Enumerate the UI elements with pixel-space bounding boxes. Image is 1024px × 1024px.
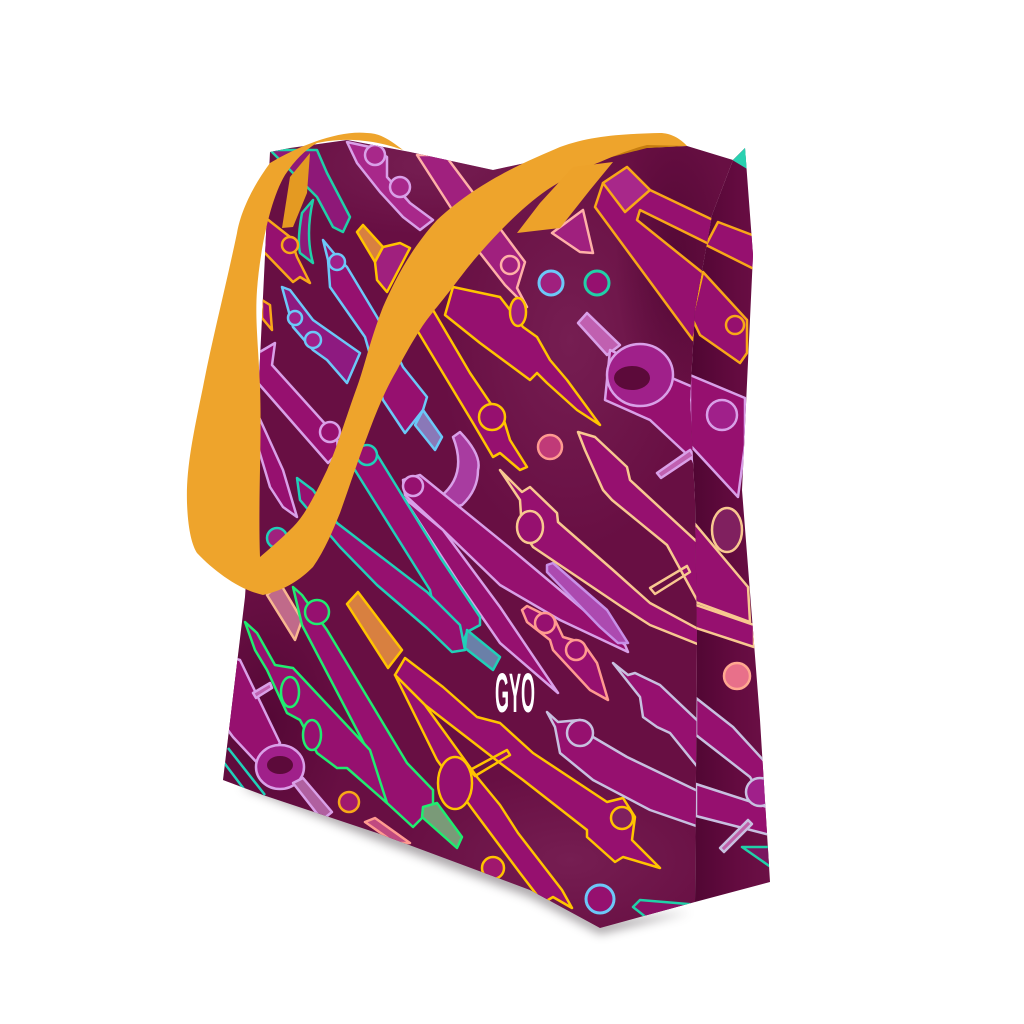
knobs upper: [538, 271, 609, 459]
compass: lilac with arc: [403, 432, 628, 693]
compass: orange left small: [262, 215, 310, 330]
compass: orange top right: [594, 166, 712, 342]
compass: green: [245, 587, 462, 848]
compass: peach long: [498, 430, 697, 646]
compass: lilac pencil: [547, 563, 628, 643]
compass: salmon top: [417, 155, 593, 307]
illustration: tote bag with compass pattern: [186, 132, 770, 939]
compass: salmon small: [522, 606, 608, 700]
strap: [187, 133, 687, 595]
bag front panel: [223, 140, 733, 928]
strap rear fold: [600, 138, 687, 160]
compass: gold large: [347, 592, 660, 908]
compass: lilac left long: [258, 343, 340, 517]
ground shadow: [240, 785, 690, 934]
bag side gusset: [690, 148, 775, 902]
knobs lower: [339, 792, 700, 918]
compass: blue lower: [282, 287, 360, 383]
compass: lilac top: [347, 142, 433, 230]
compass: gold handle and arms: [357, 225, 600, 470]
compass: lilac ring: [578, 313, 700, 478]
compass: teal large: [267, 445, 500, 670]
tube: peach handle: [267, 583, 302, 640]
strap left tab: [282, 153, 310, 228]
illustration: tote bag with compass pattern: GYO: [495, 661, 535, 724]
compass: blue upper: [323, 240, 442, 450]
compass: lilac lower left with ring: [222, 655, 332, 820]
compass: lilac lower right: [547, 663, 702, 828]
compass: teal top left: [270, 150, 350, 263]
strap right tab: [517, 162, 613, 233]
fabric shading and compass pattern: [223, 140, 713, 916]
